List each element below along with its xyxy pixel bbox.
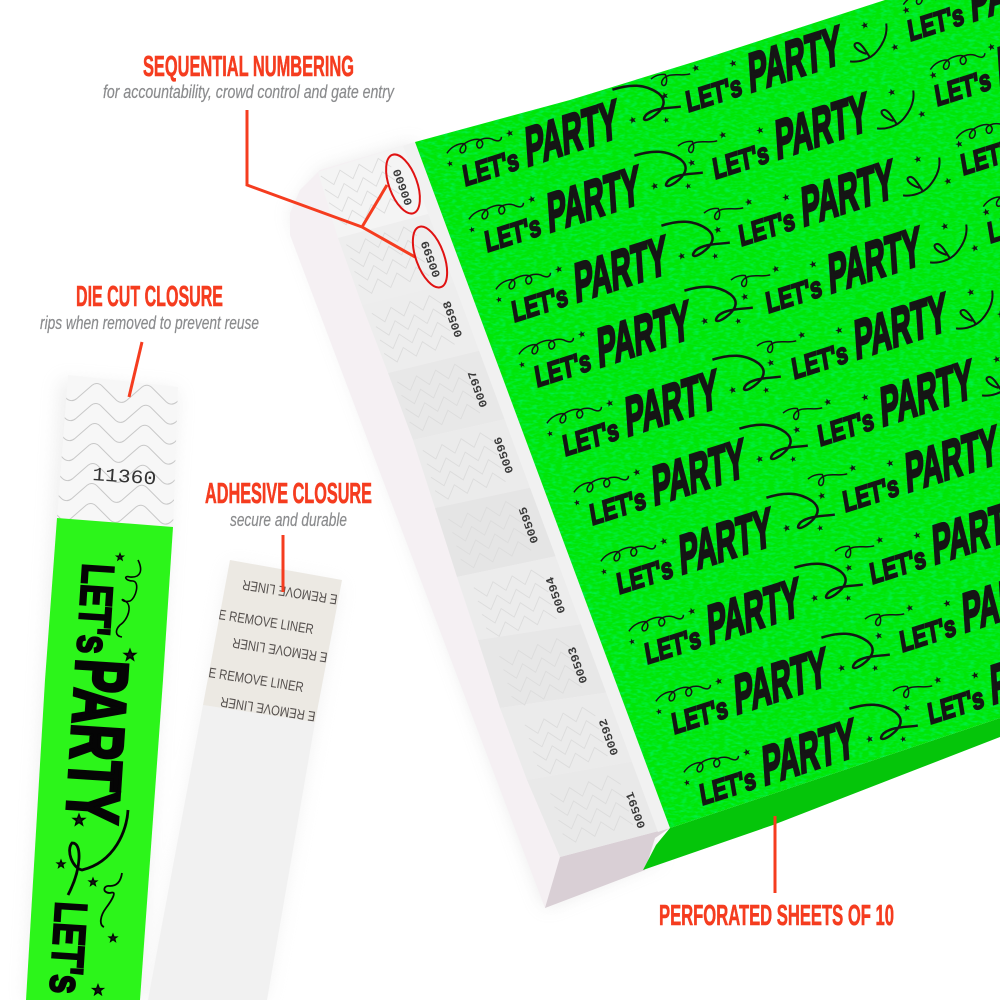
sequential numbers: 00593 [566, 645, 591, 685]
leader line to sheet edge [774, 816, 776, 893]
leader line to numbers [247, 110, 415, 257]
green paper texture [400, 0, 1000, 840]
pattern row 9 column 2: LET's [898, 610, 958, 659]
pattern row 3 column 1 [495, 220, 730, 323]
soft shadows behind products [26, 142, 660, 1000]
pattern row 1 column 2: LET's [684, 70, 744, 119]
pattern row 6 column 1 [573, 424, 808, 526]
sequential numbers: 00596 [492, 435, 517, 475]
light strip beside the green face [403, 142, 670, 832]
white numbered tabs [318, 142, 670, 857]
ellipse around 00599 [406, 222, 454, 292]
callout: sequential numbering [103, 51, 454, 292]
pattern row 10 column 1 [683, 704, 918, 806]
pattern row 2 column 3 [930, 44, 1000, 107]
sequential numbers: 00594 [544, 575, 569, 615]
die cut wave pattern [57, 383, 178, 525]
pattern row 2 column 1 [468, 150, 703, 253]
pattern row 6 column 1: LET's [588, 483, 648, 532]
sheet thickness: dark green edge [643, 718, 1000, 870]
liner REMOVE LINER printing: E REMOVE LINER [241, 577, 338, 608]
pattern row 1 column 1 [446, 84, 681, 187]
sheet side: white edge band [290, 142, 670, 908]
liner REMOVE LINER printing: E REMOVE LINER [231, 635, 328, 666]
pattern row 1 column 2 [650, 22, 898, 113]
panel: wristband sheet stack [290, 0, 1000, 908]
band swirls and stars [57, 553, 141, 994]
band LET's text: LET's [67, 562, 124, 655]
pattern row 5 column 1: LET's [561, 414, 621, 463]
pattern row 2 column 1: PARTY [546, 154, 642, 244]
pattern row 5 column 2: LET's [790, 337, 850, 386]
pattern row 8 column 1: LET's [643, 622, 703, 671]
pattern row 9 column 1 [655, 632, 890, 735]
pattern row 7 column 1 [600, 492, 835, 595]
pattern row 3 column 2: LET's [737, 204, 797, 253]
subtext: rips when removed: rips when removed to prevent reuse [40, 313, 259, 333]
band PARTY text: PARTY [50, 657, 144, 826]
pattern row 2 column 2 [678, 88, 925, 180]
pattern row 8 column 1: PARTY [706, 566, 802, 656]
sheet front edge [545, 828, 670, 908]
pattern row 3 column 2: PARTY [800, 148, 896, 238]
sequential numbers: 00599 [419, 239, 444, 279]
pattern row 8 column 2 [834, 504, 1000, 585]
pattern row 2 column 2: PARTY [774, 81, 870, 171]
sequential numbers: 00600 [391, 167, 416, 207]
pattern row 5 column 2 [756, 288, 1000, 380]
pattern row 3 column 2 [704, 156, 951, 247]
sequential numbers: 00597 [466, 369, 491, 409]
sequential numbers: 00591 [624, 790, 649, 830]
liner REMOVE LINER printing: E REMOVE LINER [219, 694, 316, 725]
pattern row 9 column 1: PARTY [733, 636, 829, 726]
white band back [148, 705, 315, 1000]
pattern row 3 column 1: LET's [510, 280, 570, 329]
chevron embossing on tabs [321, 156, 633, 845]
sequential numbers: 00598 [441, 299, 466, 339]
pattern row 10 column 1: PARTY [761, 707, 857, 797]
pattern row 2 column 1: LET's [483, 210, 543, 259]
green printed face [415, 0, 1000, 828]
panel: single die cut wristband [26, 383, 178, 1000]
subtext: secure and durable: secure and durable [230, 510, 347, 530]
subtext: accountability: for accountability, crowd control and gate entry [103, 82, 395, 102]
sequential numbers [391, 167, 649, 830]
pattern row 6 column 2: LET's [816, 404, 876, 453]
pattern row 7 column 2: LET's [841, 470, 901, 519]
heading: sequential numbering: SEQUENTIAL NUMBERING [143, 51, 354, 83]
pattern row 4 column 2 [730, 222, 978, 314]
pattern row 7 column 2 [808, 424, 998, 513]
pattern row 10 column 2 [892, 662, 1000, 725]
liner REMOVE LINER printing: E REMOVE LINER [218, 606, 315, 637]
pattern row 2 column 2: LET's [711, 137, 771, 186]
tab serial number: 11360 [92, 464, 157, 490]
adhesive release liner [203, 560, 342, 722]
white die cut closure tab [57, 375, 178, 527]
pattern row 5 column 1: PARTY [624, 358, 720, 448]
pattern row 9 column 1: LET's [670, 692, 730, 741]
pattern row 1 column 1: PARTY [524, 88, 620, 178]
pattern row 9 column 2 [864, 581, 1000, 653]
panel: adhesive back of wristband [148, 560, 342, 1000]
pattern row 4 column 1: LET's [533, 345, 593, 394]
pattern row 1 column 1: LET's [461, 144, 521, 193]
pattern row 10 column 1: LET's [698, 763, 758, 812]
liner REMOVE LINER printing [208, 577, 338, 725]
callout: die cut closure [40, 281, 259, 397]
callout: adhesive closure [205, 478, 372, 592]
heading: adhesive closure: ADHESIVE CLOSURE [205, 478, 372, 510]
repeating LET's PARTY pattern [440, 0, 1000, 820]
pattern row 6 column 1: PARTY [651, 427, 747, 517]
heading: die cut closure: DIE CUT CLOSURE [76, 281, 223, 313]
pattern row 4 column 2: LET's [764, 271, 824, 320]
green band [26, 518, 173, 1000]
pattern row 4 column 1 [518, 286, 753, 388]
liner REMOVE LINER printing: E REMOVE LINER [208, 664, 305, 695]
pattern row 7 column 1: LET's [615, 552, 675, 601]
ellipse around 00600 [379, 150, 427, 218]
pattern row 4 column 1: PARTY [596, 289, 692, 379]
pattern row 8 column 1 [628, 562, 863, 665]
sequential numbers: 00595 [517, 505, 542, 545]
pattern row 3 column 1: PARTY [573, 224, 669, 314]
pattern row 7 column 1: PARTY [678, 496, 774, 586]
leader line to liner [282, 535, 284, 592]
pattern row 6 column 2 [782, 356, 1000, 447]
pattern row 8 column 2: LET's [868, 542, 928, 591]
sequential numbers: 00592 [597, 717, 622, 757]
leader line to closure [129, 342, 142, 397]
pattern row 5 column 1 [546, 354, 781, 457]
